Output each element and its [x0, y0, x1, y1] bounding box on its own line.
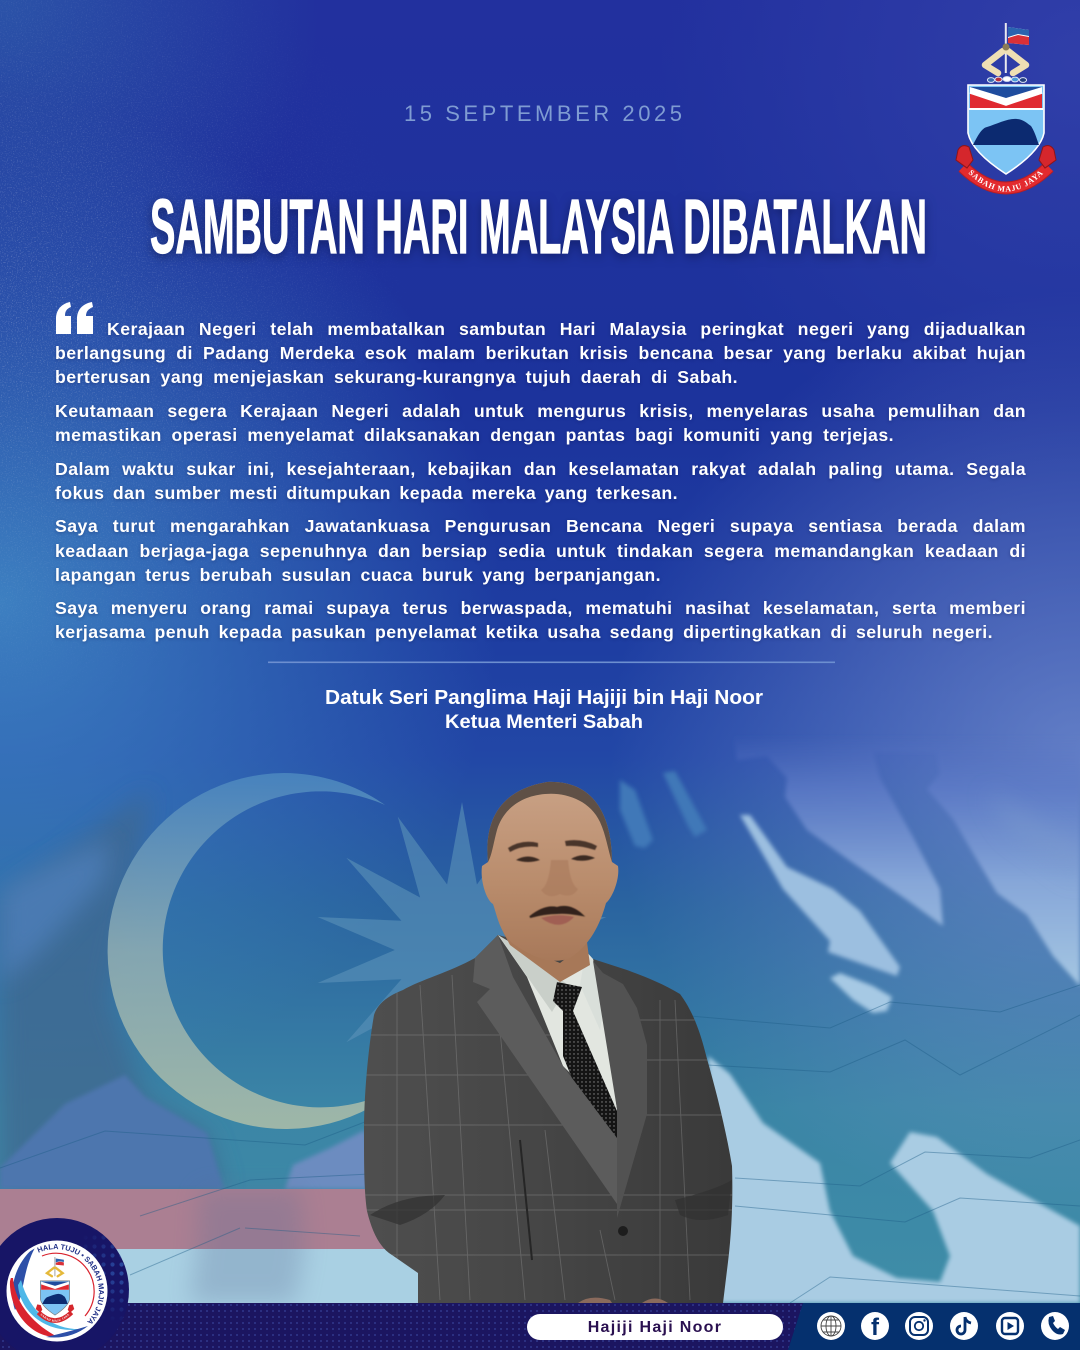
portrait of the chief minister: [364, 782, 732, 1303]
name label: Hajiji Haji Noor: [588, 1319, 722, 1336]
quote statement body: kerjasama penuh kepada pasukan penyelamat ketika usaha sedang dipertingkatkan di seluruh negeri.: [55, 622, 993, 642]
flag crescent: [108, 773, 405, 1129]
name pill: [527, 1314, 783, 1340]
icon: facebook: [861, 1312, 889, 1341]
quote statement body: berterusan yang menjejaskan sekurang-kurangnya tujuh daerah di Sabah.: [55, 367, 738, 387]
date: 15 SEPTEMBER 2025: [404, 101, 682, 126]
icon: tiktok: [950, 1312, 978, 1340]
quote statement body: lapangan terus berubah susulan cuaca buruk yang berpanjangan.: [55, 565, 661, 585]
flag star: [318, 802, 606, 1098]
quote statement body: Saya turut mengarahkan Jawatankuasa Pengurusan Bencana Negeri supaya sentiasa berada dalam: [55, 516, 1026, 536]
campaign badge logo: HALA TUJU • SABAH MAJU JAYA: [37, 1244, 104, 1324]
quote statement body: Kerajaan Negeri telah membatalkan sambutan Hari Malaysia peringkat negeri yang dijadualkan: [107, 319, 1026, 339]
icon: quotation mark: [56, 302, 93, 334]
icon: facebook: f: [871, 1314, 880, 1341]
icon: website globe: [817, 1312, 845, 1340]
quote statement body: Saya menyeru orang ramai supaya terus berwaspada, mematuhi nasihat keselamatan, serta memberi: [55, 598, 1026, 618]
state crest: [956, 23, 1056, 194]
quote statement body: fokus dan sumber mesti ditumpukan kepada mereka yang terkesan.: [55, 483, 678, 503]
pink and pale flag bands: [0, 1189, 420, 1303]
left floor shadow and light patches: [0, 790, 375, 1189]
small crest: SABAH MAJU JAYA: [40, 1314, 70, 1322]
icon: instagram: [905, 1312, 933, 1340]
state crest: SABAH MAJU JAYA: [968, 170, 1044, 192]
divider and signature: Ketua Menteri Sabah: [445, 712, 643, 733]
divider and signature: Datuk Seri Panglima Haji Hajiji bin Haji Noor: [325, 687, 763, 709]
quote statement body: Keutamaan segera Kerajaan Negeri adalah untuk mengurus krisis, menyelaras usaha pemulihan dan: [55, 401, 1026, 421]
icon: phone: [1041, 1312, 1069, 1340]
quote statement body: berlangsung di Padang Merdeka esok malam berikutan krisis bencana besar yang berlaku akibat hujan: [55, 343, 1026, 363]
quote statement body: [55, 302, 1026, 644]
divider and signature: [268, 662, 835, 733]
small crest: [36, 1257, 74, 1323]
quote statement body: keadaan berjaga-jaga sepenuhnya dan bersiap sedia untuk tindakan segera memandangkan keadaan di: [55, 541, 1026, 561]
quote statement body: memastikan operasi menyelamat dilaksanakan dengan pantas bagi komuniti yang terjejas.: [55, 425, 894, 445]
campaign badge logo: [0, 1218, 129, 1348]
right hand shadow light floor: [620, 730, 1080, 1303]
blurred shadow on upper right floor: [985, 790, 1080, 880]
floor tile lines: [0, 985, 1080, 1303]
icon: youtube: [996, 1312, 1024, 1340]
quote statement body: Dalam waktu sukar ini, kesejahteraan, kebajikan dan keselamatan rakyat adalah paling utama. Segala: [55, 459, 1026, 479]
